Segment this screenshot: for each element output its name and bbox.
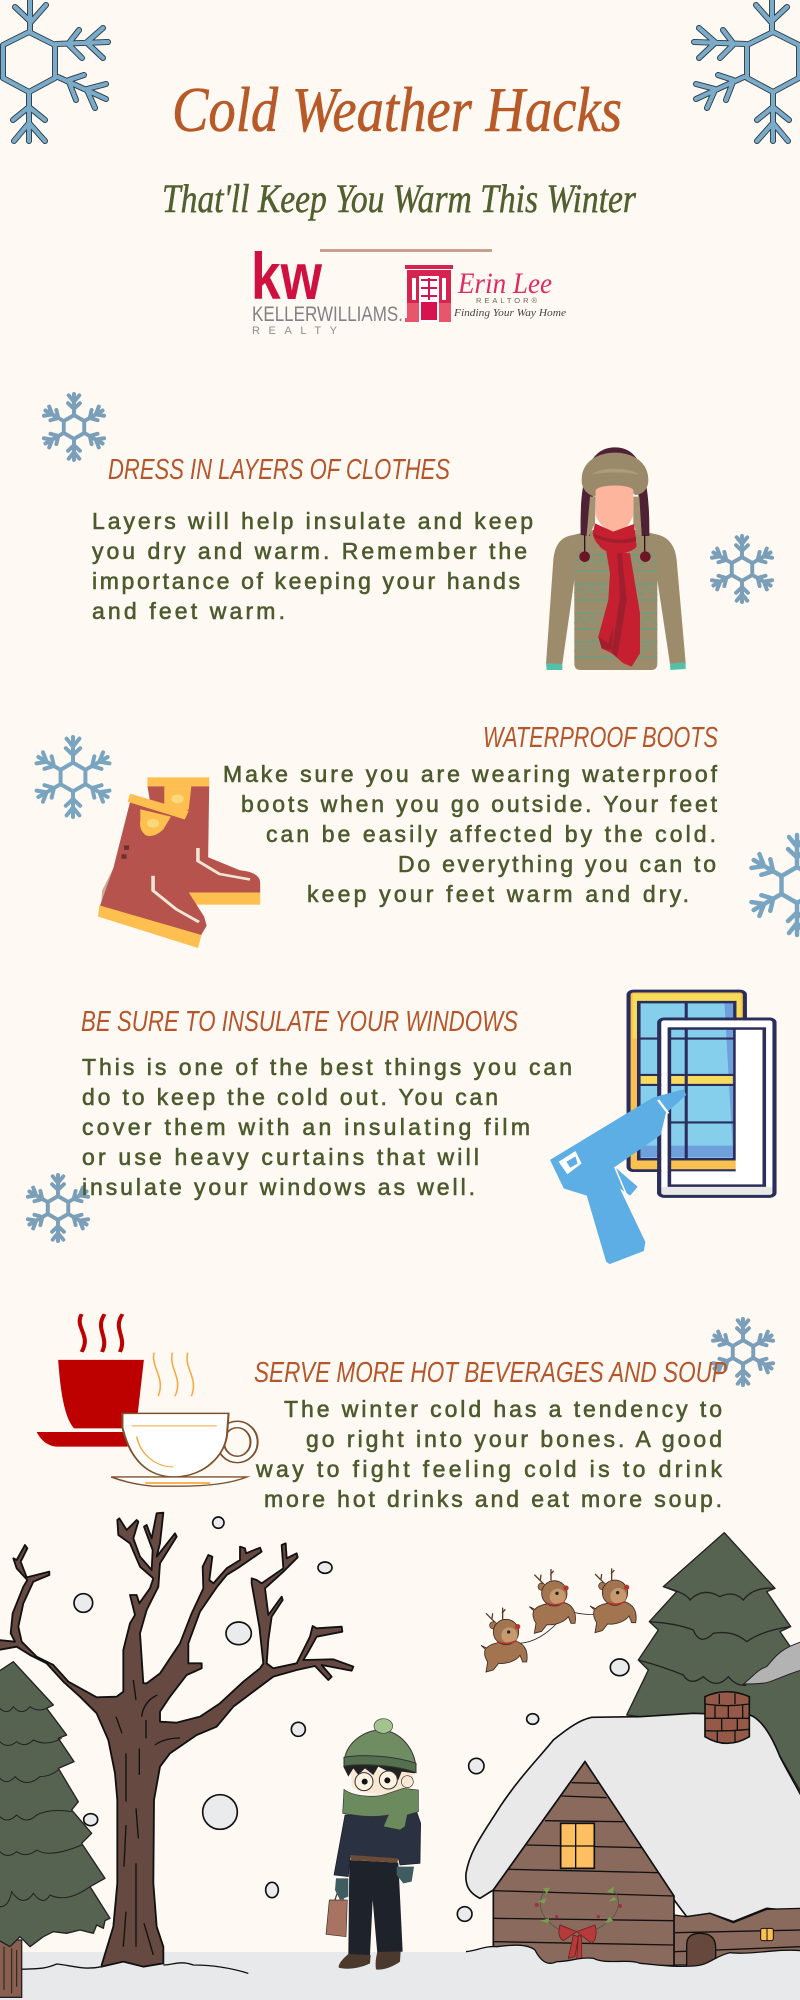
cabin window bbox=[561, 1823, 594, 1868]
text block: insulate windows: cover them with an insulating film bbox=[82, 1114, 530, 1140]
logo: Keller Williams: KELLERWILLIAMS. bbox=[252, 303, 403, 326]
text block: hot beverages: go right into your bones. A good bbox=[306, 1426, 722, 1452]
icon: snowflake bbox=[26, 1175, 90, 1241]
icon: snowflake bbox=[35, 737, 111, 817]
ground line bbox=[22, 1963, 248, 1973]
text block: waterproof boots bbox=[223, 761, 718, 907]
winter scene bbox=[0, 1513, 800, 2000]
text block: insulate windows: insulate your windows as well. bbox=[82, 1174, 475, 1200]
icon: snowflake bbox=[42, 394, 106, 460]
text block: dress in layers: and feet warm. bbox=[92, 598, 285, 624]
pine tree behind house bbox=[627, 1533, 800, 1793]
snowy roof bbox=[466, 1713, 800, 1922]
logo: Keller Williams: REALTY bbox=[252, 325, 338, 337]
text block: waterproof boots: boots when you go outside. Your feet bbox=[241, 791, 718, 817]
chimney bbox=[705, 1692, 749, 1743]
subtitle: That'll Keep You Warm This Winter bbox=[162, 176, 636, 221]
side wall bbox=[674, 1908, 800, 1967]
text block: dress in layers: you dry and warm. Remember the bbox=[92, 538, 527, 564]
text block: hot beverages: The winter cold has a tendency to bbox=[284, 1396, 722, 1422]
logo: Keller Williams bbox=[251, 239, 403, 337]
header rule bbox=[320, 249, 492, 252]
icon: boots bbox=[98, 777, 260, 948]
icon: window and caulk gun bbox=[550, 991, 774, 1264]
text block: insulate windows: or use heavy curtains that will bbox=[82, 1144, 479, 1170]
pine tree left bbox=[0, 1662, 110, 1997]
text block: insulate windows bbox=[82, 1054, 572, 1200]
text block: waterproof boots: Do everything you can to bbox=[398, 851, 716, 877]
text block: waterproof boots: keep your feet warm and dry. bbox=[307, 881, 689, 907]
text block: hot beverages bbox=[255, 1396, 722, 1512]
text block: insulate windows: do to keep the cold out. You can bbox=[82, 1084, 498, 1110]
person in hat and scarf bbox=[326, 1719, 421, 1970]
text block: hot beverages: more hot drinks and eat more soup. bbox=[264, 1486, 722, 1512]
logo: Erin Lee realtor: REALTOR® bbox=[476, 296, 537, 305]
wreath and bow bbox=[535, 1887, 622, 1960]
logo: Erin Lee realtor: Erin Lee bbox=[457, 267, 552, 300]
heading: insulate windows: BE SURE TO INSULATE YOUR WINDOWS bbox=[81, 1006, 518, 1038]
front snow drift bbox=[466, 1945, 800, 2000]
icon: hot beverages bbox=[37, 1314, 258, 1486]
text block: waterproof boots: Make sure you are wearing waterproof bbox=[223, 761, 718, 787]
house, tree and reindeer bbox=[466, 1533, 800, 2000]
icon: snowflake bbox=[749, 835, 800, 935]
icon: corner snowflake top left bbox=[3, 0, 108, 141]
heading: waterproof boots: WATERPROOF BOOTS bbox=[483, 722, 718, 754]
logo: Erin Lee realtor: Finding Your Way Home bbox=[453, 308, 567, 319]
text block: dress in layers bbox=[92, 508, 533, 624]
text block: waterproof boots: can be easily affected by the cold. bbox=[266, 821, 716, 847]
heading: dress in layers: DRESS IN LAYERS OF CLOTHES bbox=[108, 454, 450, 486]
icon: person in winter hat, sweater and scarf bbox=[546, 447, 686, 670]
text block: insulate windows: This is one of the best things you can bbox=[82, 1054, 572, 1080]
logo: Keller Williams: kw bbox=[251, 239, 323, 313]
smoke bbox=[743, 1642, 800, 1684]
text block: dress in layers: Layers will help insulate and keep bbox=[92, 508, 533, 534]
bare tree bbox=[0, 1513, 353, 1967]
icon: corner snowflake top right bbox=[694, 0, 799, 141]
text block: dress in layers: importance of keeping your hands bbox=[92, 568, 520, 594]
icon: snowflake bbox=[710, 536, 774, 602]
snowy ground bbox=[0, 1952, 800, 2000]
logo: Erin Lee realtor bbox=[405, 265, 567, 322]
cabin front wall bbox=[493, 1762, 674, 1966]
flying reindeer bbox=[481, 1568, 636, 1672]
text block: hot beverages: way to fight feeling cold is to drink bbox=[255, 1456, 722, 1482]
icon: snowflake bbox=[711, 1319, 775, 1385]
falling snow bbox=[74, 1517, 629, 1921]
title: Cold Weather Hacks bbox=[172, 74, 622, 145]
